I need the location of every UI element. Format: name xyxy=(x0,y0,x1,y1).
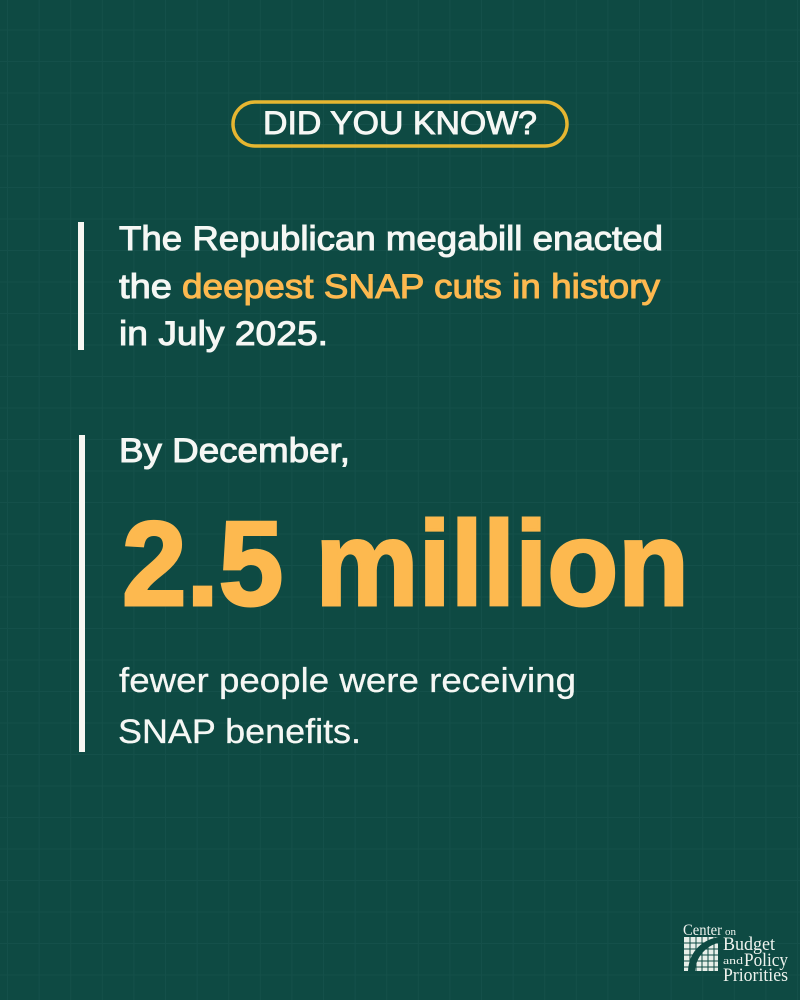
text block: fewer people: SNAP benefits. xyxy=(118,713,361,751)
accent bar: second statement xyxy=(79,435,85,752)
logo: center on budget and policy priorities: on xyxy=(725,926,736,938)
logo: center on budget and policy priorities: Budget xyxy=(723,934,776,955)
icon: grid with arch xyxy=(684,937,718,971)
badge: did you know xyxy=(233,102,567,146)
text block: megabill statement: in July 2025. xyxy=(119,315,328,353)
text block: megabill statement xyxy=(119,220,663,353)
logo: center on budget and policy priorities: Center xyxy=(683,922,723,939)
logo: center on budget and policy priorities: and xyxy=(723,955,744,967)
text block: fewer people: fewer people were receiving xyxy=(119,662,576,700)
logo: center on budget and policy priorities: Priorities xyxy=(723,965,788,986)
badge: did you know: DID YOU KNOW? xyxy=(263,105,537,141)
logo: center on budget and policy priorities: Policy xyxy=(744,950,788,971)
text block: fewer people xyxy=(118,662,576,751)
text block: megabill statement: the xyxy=(119,268,172,306)
logo: center on budget and policy priorities xyxy=(683,922,788,986)
text block: by december: By December, xyxy=(119,432,350,470)
text block: megabill statement: The Republican megabill enacted xyxy=(119,220,663,258)
accent bar: first statement xyxy=(78,222,84,350)
text block: megabill statement: deepest SNAP cuts in history xyxy=(182,268,660,306)
big number: 2.5 million: 2.5 million xyxy=(122,497,689,631)
